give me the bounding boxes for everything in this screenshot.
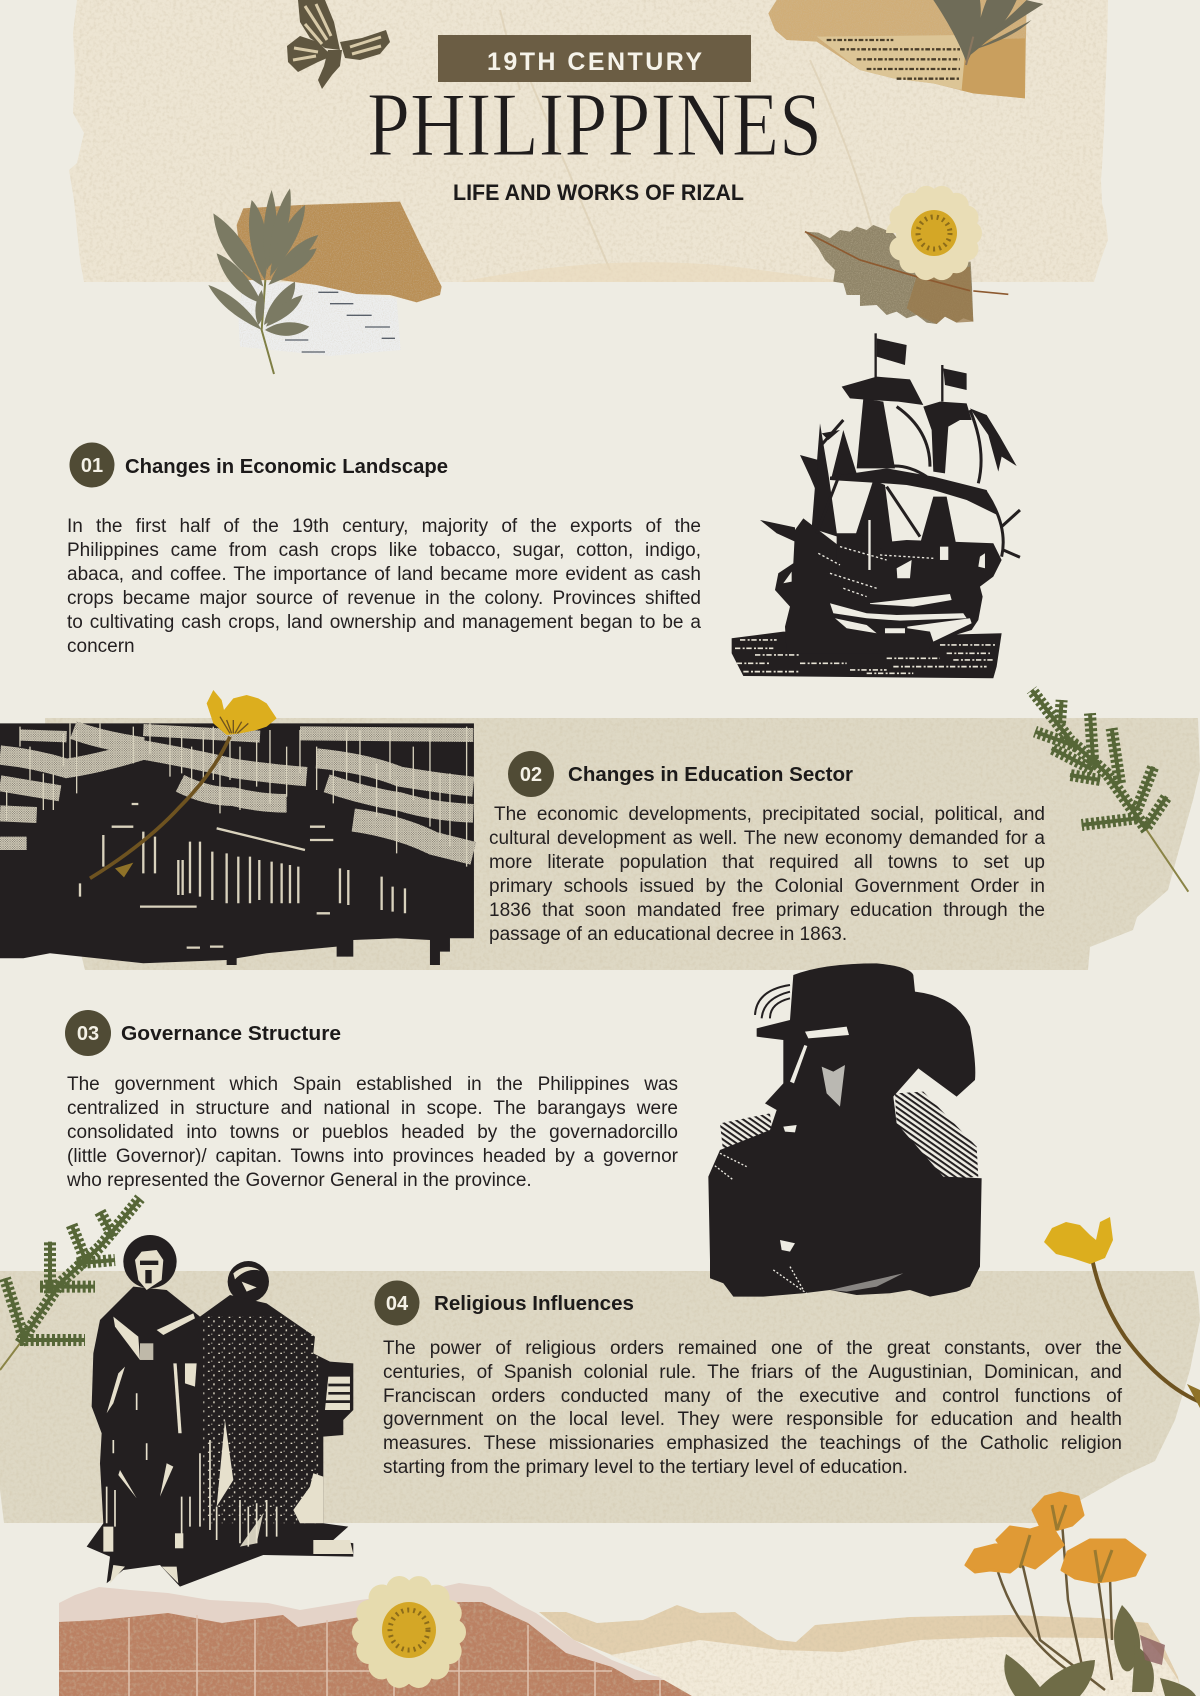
body text 03 [67, 1073, 684, 1198]
subtitle: LIFE AND WORKS OF RIZAL [453, 180, 744, 205]
number badge 03: 03 [77, 1023, 99, 1045]
body text 01: abaca, and coffee. The importance of land became more evident as cash [67, 564, 701, 585]
heading 04: Religious Influences [434, 1293, 634, 1315]
number badge 02: 02 [520, 764, 542, 786]
number badge 02 [508, 751, 554, 797]
body text 04: Franciscan orders conducted many of the executive and control functions of [383, 1386, 1122, 1407]
body text 04: The power of religious orders remained one of the great constants, over the [383, 1338, 1122, 1359]
panel: torn title paper [69, 0, 1108, 282]
icon: pressed leaf top right [933, 0, 1043, 65]
number badge 03 [65, 1010, 111, 1056]
icon: fern right [1032, 690, 1188, 892]
body text 01 [67, 515, 707, 665]
number badge 01 [70, 442, 114, 488]
heading 01: Changes in Economic Landscape [125, 456, 448, 478]
panel: band education [45, 718, 1200, 970]
heading 03: Governance Structure [121, 1023, 341, 1045]
panel: brown grid paper [59, 1602, 692, 1696]
body text 04: government on the local level. They were responsible for education and health [383, 1409, 1122, 1430]
section 03: governance structure [65, 1010, 684, 1198]
body text 03: consolidated into towns or pueblos headed by the governadorcillo [67, 1122, 678, 1143]
title tag: 19th century [438, 35, 751, 82]
icon: fern left [0, 1198, 140, 1370]
section 02: education sector [489, 751, 1051, 953]
body text 04: starting from the primary level to the tertiary level of education. [383, 1457, 908, 1478]
body text 03: (little Governor)/ capitan. Towns into provinces headed by a governor [67, 1146, 678, 1167]
illustration: portrait of man in hat [708, 963, 982, 1297]
body text 02: cultural development as well. The new economy demanded for a [489, 828, 1045, 849]
scrap: tan and birch paper [237, 202, 442, 356]
body text 02: passage of an educational decree in 1863. [489, 924, 847, 945]
icon: orange pressed flowers [966, 1493, 1196, 1696]
body text 03: centralized in structure and national in scope. The barangays were [67, 1098, 678, 1119]
body text 04 [383, 1337, 1128, 1487]
icon: daisy top [896, 195, 972, 271]
body text 01: crops became major source of revenue in the colony. Provinces shifted [67, 588, 701, 609]
number badge 04: 04 [386, 1293, 409, 1315]
illustration: two friars [87, 1235, 353, 1587]
icon: daisy bottom [363, 1586, 455, 1678]
panel: torn pink paper layer [59, 1583, 692, 1696]
icon: butterfly [287, 0, 390, 89]
illustration: galleon ship [732, 333, 1020, 678]
section 01: economic landscape [67, 442, 707, 665]
number badge 04 [374, 1280, 420, 1326]
panel: torn cream paper bottom right [539, 1605, 1182, 1696]
body text 03: who represented the Governor General in the province. [67, 1170, 532, 1191]
body text 02: 1836 that soon mandated free primary education through the [489, 900, 1045, 921]
title tag: 19th century: 19TH CENTURY [487, 48, 702, 76]
body text 04: centuries, of Spanish colonial rule. The friars of the Augustinian, Dominican, and [383, 1362, 1122, 1383]
body text 04: measures. These missionaries emphasized the teachings of the Catholic religion [383, 1433, 1122, 1454]
body text 02: The economic developments, precipitated social, political, and [494, 804, 1045, 825]
body text 02: primary schools issued by the Colonial Government Order in [489, 876, 1045, 897]
icon: yellow flower with stem [90, 690, 277, 878]
icon: pressed leaf left [208, 188, 318, 374]
body text 01: to cultivating cash crops, land ownership and management began to be a [67, 612, 701, 633]
body text 02: more literate population that required all towns to set up [489, 852, 1045, 873]
body text 02 [489, 803, 1051, 953]
number badge 01: 01 [81, 455, 103, 477]
body text 01: Philippines came from cash crops like tobacco, sugar, cotton, indigo, [67, 540, 701, 561]
body text 01: In the first half of the 19th century, majority of the exports of the [67, 516, 701, 537]
body text 01: concern [67, 636, 135, 657]
panel: band religion [0, 1271, 1200, 1523]
icon: pressed brown leaf [805, 225, 1008, 324]
scrap: newspaper clipping top right [768, 0, 1027, 98]
body text 03: The government which Spain established in the Philippines was [67, 1074, 678, 1095]
illustration: colonial building [0, 723, 474, 965]
section 04: religious influences [374, 1280, 1128, 1487]
title: Philippines: PHILIPPINES [367, 74, 822, 175]
heading 02: Changes in Education Sector [568, 764, 853, 786]
icon: yellow flower right [1044, 1217, 1200, 1408]
